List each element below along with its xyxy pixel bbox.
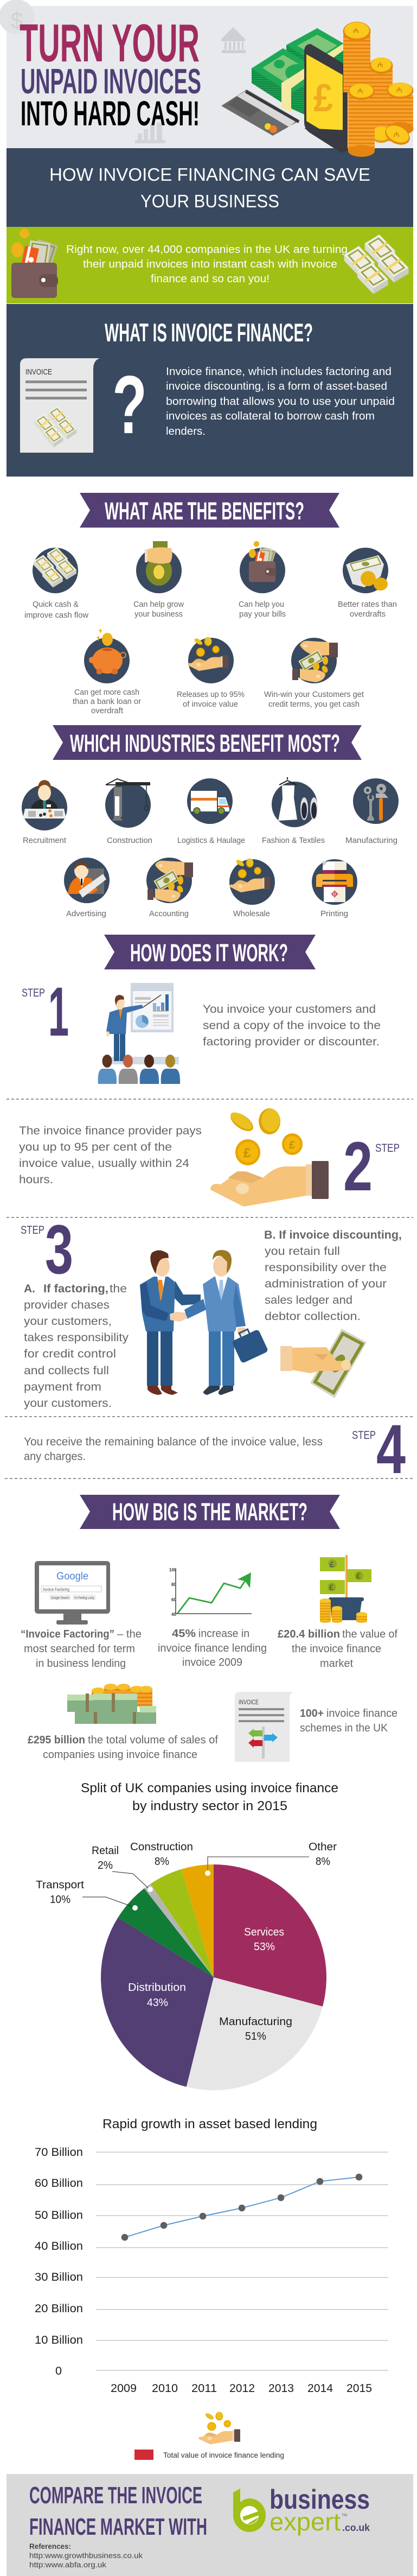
icon: growth chart: 40: [171, 1612, 176, 1617]
step label: STEP: [375, 1142, 400, 1154]
factoring text: takes responsibility: [24, 1331, 129, 1344]
stat: 20.4 billion: [278, 1628, 397, 1670]
label: services: [244, 1926, 284, 1953]
benefit: more cash: overdraft: [91, 706, 124, 715]
icon: google monitor: Google: [56, 1571, 88, 1582]
logo: business expert: expert: [270, 2508, 341, 2536]
logo: business expert: business: [270, 2484, 370, 2515]
discounting text: responsibility over the: [265, 1261, 387, 1274]
discounting text: you retain full: [265, 1245, 340, 1258]
title: turn your: TURN YOUR: [20, 13, 200, 73]
step 1 text: send a copy of the invoice to the: [203, 1019, 381, 1032]
benefit: better rates: [338, 548, 397, 619]
label: other: 8%: [316, 1855, 330, 1868]
benefit: quick cash: [24, 547, 88, 620]
references: References:: [29, 2542, 71, 2550]
benefit: more cash: Can get more cash: [74, 688, 139, 697]
benefit: better rates: overdrafts: [350, 610, 386, 619]
illustration: audience: [98, 1055, 180, 1084]
label: manufacturing: [219, 2016, 292, 2042]
panel: footer: [7, 2474, 413, 2576]
benefit: win-win: [264, 638, 364, 709]
illustration: hand with coins: [210, 1108, 329, 1207]
benefit: grow business: your business: [134, 610, 183, 619]
subtitle: [49, 164, 370, 211]
step label: STEP: [352, 1429, 376, 1442]
stat: invoice factoring search term: most searched for term: [24, 1643, 135, 1655]
icon: invoice with signpost: [235, 1692, 293, 1762]
intro text: their unpaid invoices into instant cash with invoice: [83, 258, 337, 270]
benefit: grow business: [133, 541, 184, 619]
step number 2: 2: [343, 1128, 373, 1205]
logo: business expert: .co.uk: [342, 2522, 370, 2533]
panel: market stats: [21, 1555, 397, 1762]
benefit: pay bills: Can help you: [239, 600, 284, 609]
label: distribution: [128, 1982, 186, 2009]
definition text: invoice discounting, is a form of asset-based: [166, 380, 387, 392]
legend: Total value of invoice finance lending: [163, 2451, 284, 2459]
industry: fashion: Fashion & Textiles: [262, 836, 325, 845]
stat: 45% increase: invoice finance lending: [158, 1642, 267, 1654]
label: other: [309, 1841, 337, 1868]
step 4 text: You receive the remaining balance of the invoice value, less: [24, 1436, 323, 1448]
heading ribbon: industries: [53, 725, 362, 760]
discounting text: administration of your: [265, 1277, 387, 1290]
benefit: grow business: Can help grow: [133, 600, 184, 609]
stat: 45% increase: [158, 1628, 267, 1668]
illustration: hand holding banknote: [280, 1329, 367, 1398]
industry: construction: [105, 779, 152, 845]
heading ribbon: market: [80, 1495, 340, 1529]
factoring text: [24, 1282, 129, 1410]
label: services: 53%: [254, 1941, 275, 1953]
footer heading: COMPARE THE INVOICE: [29, 2482, 202, 2509]
panel: industries: [22, 777, 399, 918]
y axis labels: 70 Billion: [35, 2146, 83, 2159]
factoring text: A.: [24, 1282, 35, 1295]
stat: 100+ schemes: invoice finance: [326, 1708, 397, 1720]
stat: 295 billion: companies using invoice finance: [43, 1749, 197, 1761]
factoring text: the: [110, 1282, 127, 1295]
benefit: releases up to 95%: [177, 637, 245, 709]
label: construction: Construction: [130, 1841, 193, 1853]
stat: 100+ schemes: 100+: [300, 1708, 324, 1720]
stat: 100+ schemes: schemes in the UK: [300, 1722, 388, 1734]
benefit: quick cash: improve cash flow: [24, 611, 88, 620]
benefit: pay bills: [239, 541, 286, 619]
illustration: cash, phone, card and coins: [221, 22, 413, 153]
label: services: Services: [244, 1926, 284, 1938]
panel: pie chart: [36, 1781, 338, 2090]
icon: invoice document: [20, 358, 100, 453]
benefit: more cash: than a bank loan or: [73, 697, 141, 706]
step 2 text: you up to 95 per cent of the: [19, 1140, 172, 1153]
stat: 100+ schemes: [300, 1708, 397, 1734]
industry: manufacturing: [345, 778, 399, 845]
label: manufacturing: Manufacturing: [219, 2016, 292, 2028]
industry: logistics: [177, 778, 245, 845]
factoring text: provider chases: [24, 1298, 110, 1311]
illustration: cash, phone, card and coins: ₼: [394, 130, 400, 138]
step 2 text: hours.: [19, 1173, 53, 1186]
pie chart title: Split of UK companies using invoice finance: [81, 1781, 338, 1795]
icon: hand with coins: [198, 2412, 240, 2444]
panel: what is invoice finance: [7, 304, 413, 477]
definition text: invoices as collateral to borrow cash from: [166, 410, 375, 422]
panel: green intro: [7, 227, 413, 303]
icon: cash bricks: [344, 234, 409, 294]
x axis labels: 2012: [229, 2382, 255, 2395]
benefit: releases up to 95%: of invoice value: [183, 700, 238, 709]
benefit: pay bills: pay your bills: [239, 610, 286, 619]
icon: dollar watermark: $: [11, 8, 23, 33]
x axis labels: 2011: [191, 2382, 217, 2395]
definition text: lenders.: [166, 425, 206, 437]
stat: 45% increase: 45%: [172, 1628, 196, 1640]
step 1 text: [203, 1003, 381, 1048]
step label: STEP: [22, 987, 45, 999]
industry: accounting: Accounting: [149, 909, 189, 918]
icon: google monitor: [35, 1561, 110, 1625]
x axis labels: 2013: [268, 2382, 294, 2395]
icon: bank watermark: [221, 27, 246, 53]
stat: invoice factoring search term: [21, 1628, 142, 1670]
industry: logistics: Logistics & Haulage: [177, 836, 245, 845]
icon: money tree: £: [329, 1583, 333, 1591]
stat: 20.4 billion: market: [320, 1658, 353, 1670]
icon: growth chart: [169, 1568, 252, 1617]
benefit: win-win: credit terms, you get cash: [268, 700, 360, 709]
panel: step 3: [21, 1211, 402, 1410]
y axis labels: 30 Billion: [35, 2271, 83, 2283]
stat: invoice factoring search term: “Invoice Factoring”: [21, 1628, 114, 1640]
label: manufacturing: 51%: [245, 2031, 266, 2042]
coin overlapping band: [304, 84, 375, 157]
benefit: quick cash: Quick cash &: [33, 600, 79, 609]
illustration: two men shaking hands: [140, 1250, 268, 1395]
industry: manufacturing: Manufacturing: [345, 836, 397, 845]
industry: wholesale: Wholesale: [233, 909, 270, 918]
icon: money tree: £: [330, 1560, 334, 1569]
panel: step 4: [24, 1411, 406, 1488]
references: [29, 2542, 143, 2569]
benefit: better rates: Better rates than: [338, 600, 397, 609]
step 2 text: [19, 1124, 202, 1186]
step number 1: 1: [48, 973, 69, 1051]
label: retail: [92, 1844, 119, 1871]
label: other: Other: [309, 1841, 337, 1853]
label: transport: 10%: [50, 1893, 70, 1906]
factoring text: for credit control: [24, 1347, 116, 1360]
stat: 295 billion: [28, 1734, 218, 1761]
legend: [134, 2450, 284, 2460]
industry: recruitment: Recruitment: [23, 836, 67, 845]
industry: advertising: Advertising: [66, 909, 106, 918]
industry: advertising: [64, 858, 110, 918]
step 1 text: You invoice your customers and: [203, 1003, 376, 1016]
icon: wallet: [11, 229, 58, 298]
pie chart title: by industry sector in 2015: [132, 1799, 287, 1813]
icon: invoice with signpost: INVOICE: [239, 1698, 259, 1706]
illustration: cash, phone, card and coins: £: [313, 77, 333, 120]
illustration: cash, phone, card and coins: ₼: [377, 61, 383, 69]
illustration: cash, phone, card and coins: ₼: [353, 27, 359, 35]
factoring text: your customers,: [24, 1315, 112, 1328]
step number 4: 4: [376, 1411, 406, 1488]
icon: growth chart: 60: [171, 1597, 176, 1602]
definition text: Invoice finance, which includes factoring and: [166, 365, 392, 378]
definition text: [166, 365, 395, 437]
stat: invoice factoring search term: – the: [117, 1628, 142, 1640]
icon: google monitor: I'm Feeling Lucky: [74, 1595, 94, 1600]
discounting text: B. If invoice discounting,: [264, 1228, 402, 1241]
heading ribbon: how does it work: [104, 935, 316, 969]
title: into hard cash: INTO HARD CASH!: [21, 94, 200, 133]
y axis labels: 40 Billion: [35, 2240, 83, 2253]
stat: 20.4 billion: the invoice finance: [292, 1643, 381, 1655]
footer heading: [29, 2482, 207, 2540]
factoring text: payment from: [24, 1380, 101, 1393]
y axis labels: 20 Billion: [35, 2302, 83, 2315]
label: construction: [130, 1841, 193, 1868]
y axis labels: 10 Billion: [35, 2334, 83, 2346]
x axis labels: [111, 2382, 372, 2395]
icon: money tree: £: [356, 1571, 361, 1580]
icon: google monitor: Google Search: [51, 1595, 69, 1600]
x axis labels: 2015: [347, 2382, 372, 2395]
label: distribution: Distribution: [128, 1982, 186, 1994]
x axis labels: 2010: [152, 2382, 178, 2395]
stat: 295 billion: £295 billion: [28, 1734, 85, 1746]
x axis labels: 2014: [307, 2382, 333, 2395]
step 2 text: invoice value, usually within 24: [19, 1157, 189, 1170]
icon: money tree: [320, 1555, 371, 1623]
stat: 45% increase: increase in: [198, 1628, 249, 1640]
panel: step 2: [19, 1108, 400, 1207]
leader lines: [82, 1857, 309, 1911]
industry: wholesale: [229, 859, 275, 918]
label: retail: 2%: [98, 1859, 113, 1871]
step label: STEP: [21, 1224, 44, 1236]
step number 3: 3: [45, 1211, 73, 1289]
industry: recruitment: [22, 780, 67, 845]
icon: bar chart watermark: [135, 123, 165, 143]
footer heading: FINANCE MARKET WITH: [29, 2514, 207, 2540]
panel: subtitle band: [7, 148, 413, 227]
factoring text: If factoring,: [43, 1282, 108, 1295]
panel: hero header: [0, 0, 413, 153]
discounting text: [264, 1228, 402, 1323]
factoring text: your customers.: [24, 1397, 112, 1410]
benefit: win-win: Win-win your Customers get: [264, 690, 364, 699]
intro text: Right now, over 44,000 companies in the UK are turning: [66, 244, 348, 256]
label: transport: Transport: [36, 1879, 84, 1891]
logo: business expert: TM: [342, 2514, 347, 2517]
heading ribbon: benefits: [80, 493, 339, 528]
factoring text: and collects full: [24, 1364, 109, 1377]
illustration: cash, phone, card and coins: ₼: [396, 86, 402, 94]
industry: accounting: [146, 858, 193, 918]
references: http:www.abfa.org.uk: [29, 2560, 107, 2569]
step 4 text: any charges.: [24, 1450, 86, 1463]
line chart title: Rapid growth in asset based lending: [102, 2117, 317, 2131]
step 2 text: The invoice finance provider pays: [19, 1124, 202, 1137]
discounting text: debtor collection.: [265, 1310, 361, 1323]
subtitle: YOUR BUSINESS: [140, 191, 279, 211]
coin overlapping band: ₼: [357, 87, 363, 95]
benefit: releases up to 95%: Releases up to 95%: [177, 690, 245, 699]
y axis labels: 0: [55, 2365, 62, 2377]
icon: growth chart: 80: [171, 1582, 176, 1587]
heading ribbon: how does it work: HOW DOES IT WORK?: [130, 939, 288, 967]
logo: business expert: [233, 2484, 370, 2536]
step 4 text: [24, 1436, 323, 1463]
stat: 20.4 billion: the value of: [342, 1628, 397, 1640]
illustration: hand with coins: £: [243, 1146, 251, 1160]
icon: google monitor: Invoice Factoring: [43, 1587, 69, 1592]
data line: [121, 2174, 362, 2241]
label: construction: 8%: [155, 1855, 169, 1868]
title: unpaid invoices: UNPAID INVOICES: [21, 61, 201, 101]
pie chart slices: [101, 1864, 326, 2090]
discounting text: sales ledger and: [265, 1293, 352, 1306]
panel: step 1: [22, 973, 381, 1084]
stat: 295 billion: the total volume of sales of: [88, 1734, 218, 1746]
y axis labels: 60 Billion: [35, 2177, 83, 2190]
label: retail: Retail: [92, 1844, 119, 1857]
panel: line chart: [35, 2117, 388, 2460]
y axis labels: [35, 2146, 83, 2377]
icon: growth chart: 100: [169, 1568, 177, 1572]
icon: dollar watermark: [0, 0, 35, 34]
label: transport: [36, 1879, 84, 1906]
illustration: hand with coins: £: [289, 1139, 295, 1151]
industry: construction: Construction: [107, 836, 152, 845]
step 1 text: factoring provider or discounter.: [203, 1035, 380, 1048]
stat: 20.4 billion: £20.4 billion: [278, 1628, 340, 1640]
pie chart title: [81, 1781, 338, 1813]
industry: printing: Printing: [320, 909, 348, 918]
icon: money pile: [67, 1684, 156, 1724]
definition text: borrowing that allows you to use your unpaid: [166, 395, 395, 408]
icon: question mark: ?: [112, 359, 147, 451]
stat: 45% increase: invoice 2009: [182, 1657, 242, 1668]
references: http:www.growthbusiness.co.uk: [29, 2551, 143, 2560]
industry: fashion: [262, 777, 325, 845]
illustration: presenter and audience: [106, 983, 179, 1064]
label: distribution: 43%: [147, 1997, 168, 2009]
icon: invoice document: INVOICE: [25, 367, 52, 377]
panel: benefits: [24, 541, 397, 715]
stat: invoice factoring search term: in business lending: [36, 1658, 126, 1670]
intro text: [66, 244, 348, 285]
y axis labels: 50 Billion: [35, 2209, 83, 2222]
x axis labels: 2009: [111, 2382, 137, 2395]
intro text: finance and so can you!: [151, 273, 270, 285]
benefit: more cash: [73, 628, 141, 715]
industry: printing: [312, 859, 357, 918]
subtitle: HOW INVOICE FINANCING CAN SAVE: [49, 164, 370, 185]
